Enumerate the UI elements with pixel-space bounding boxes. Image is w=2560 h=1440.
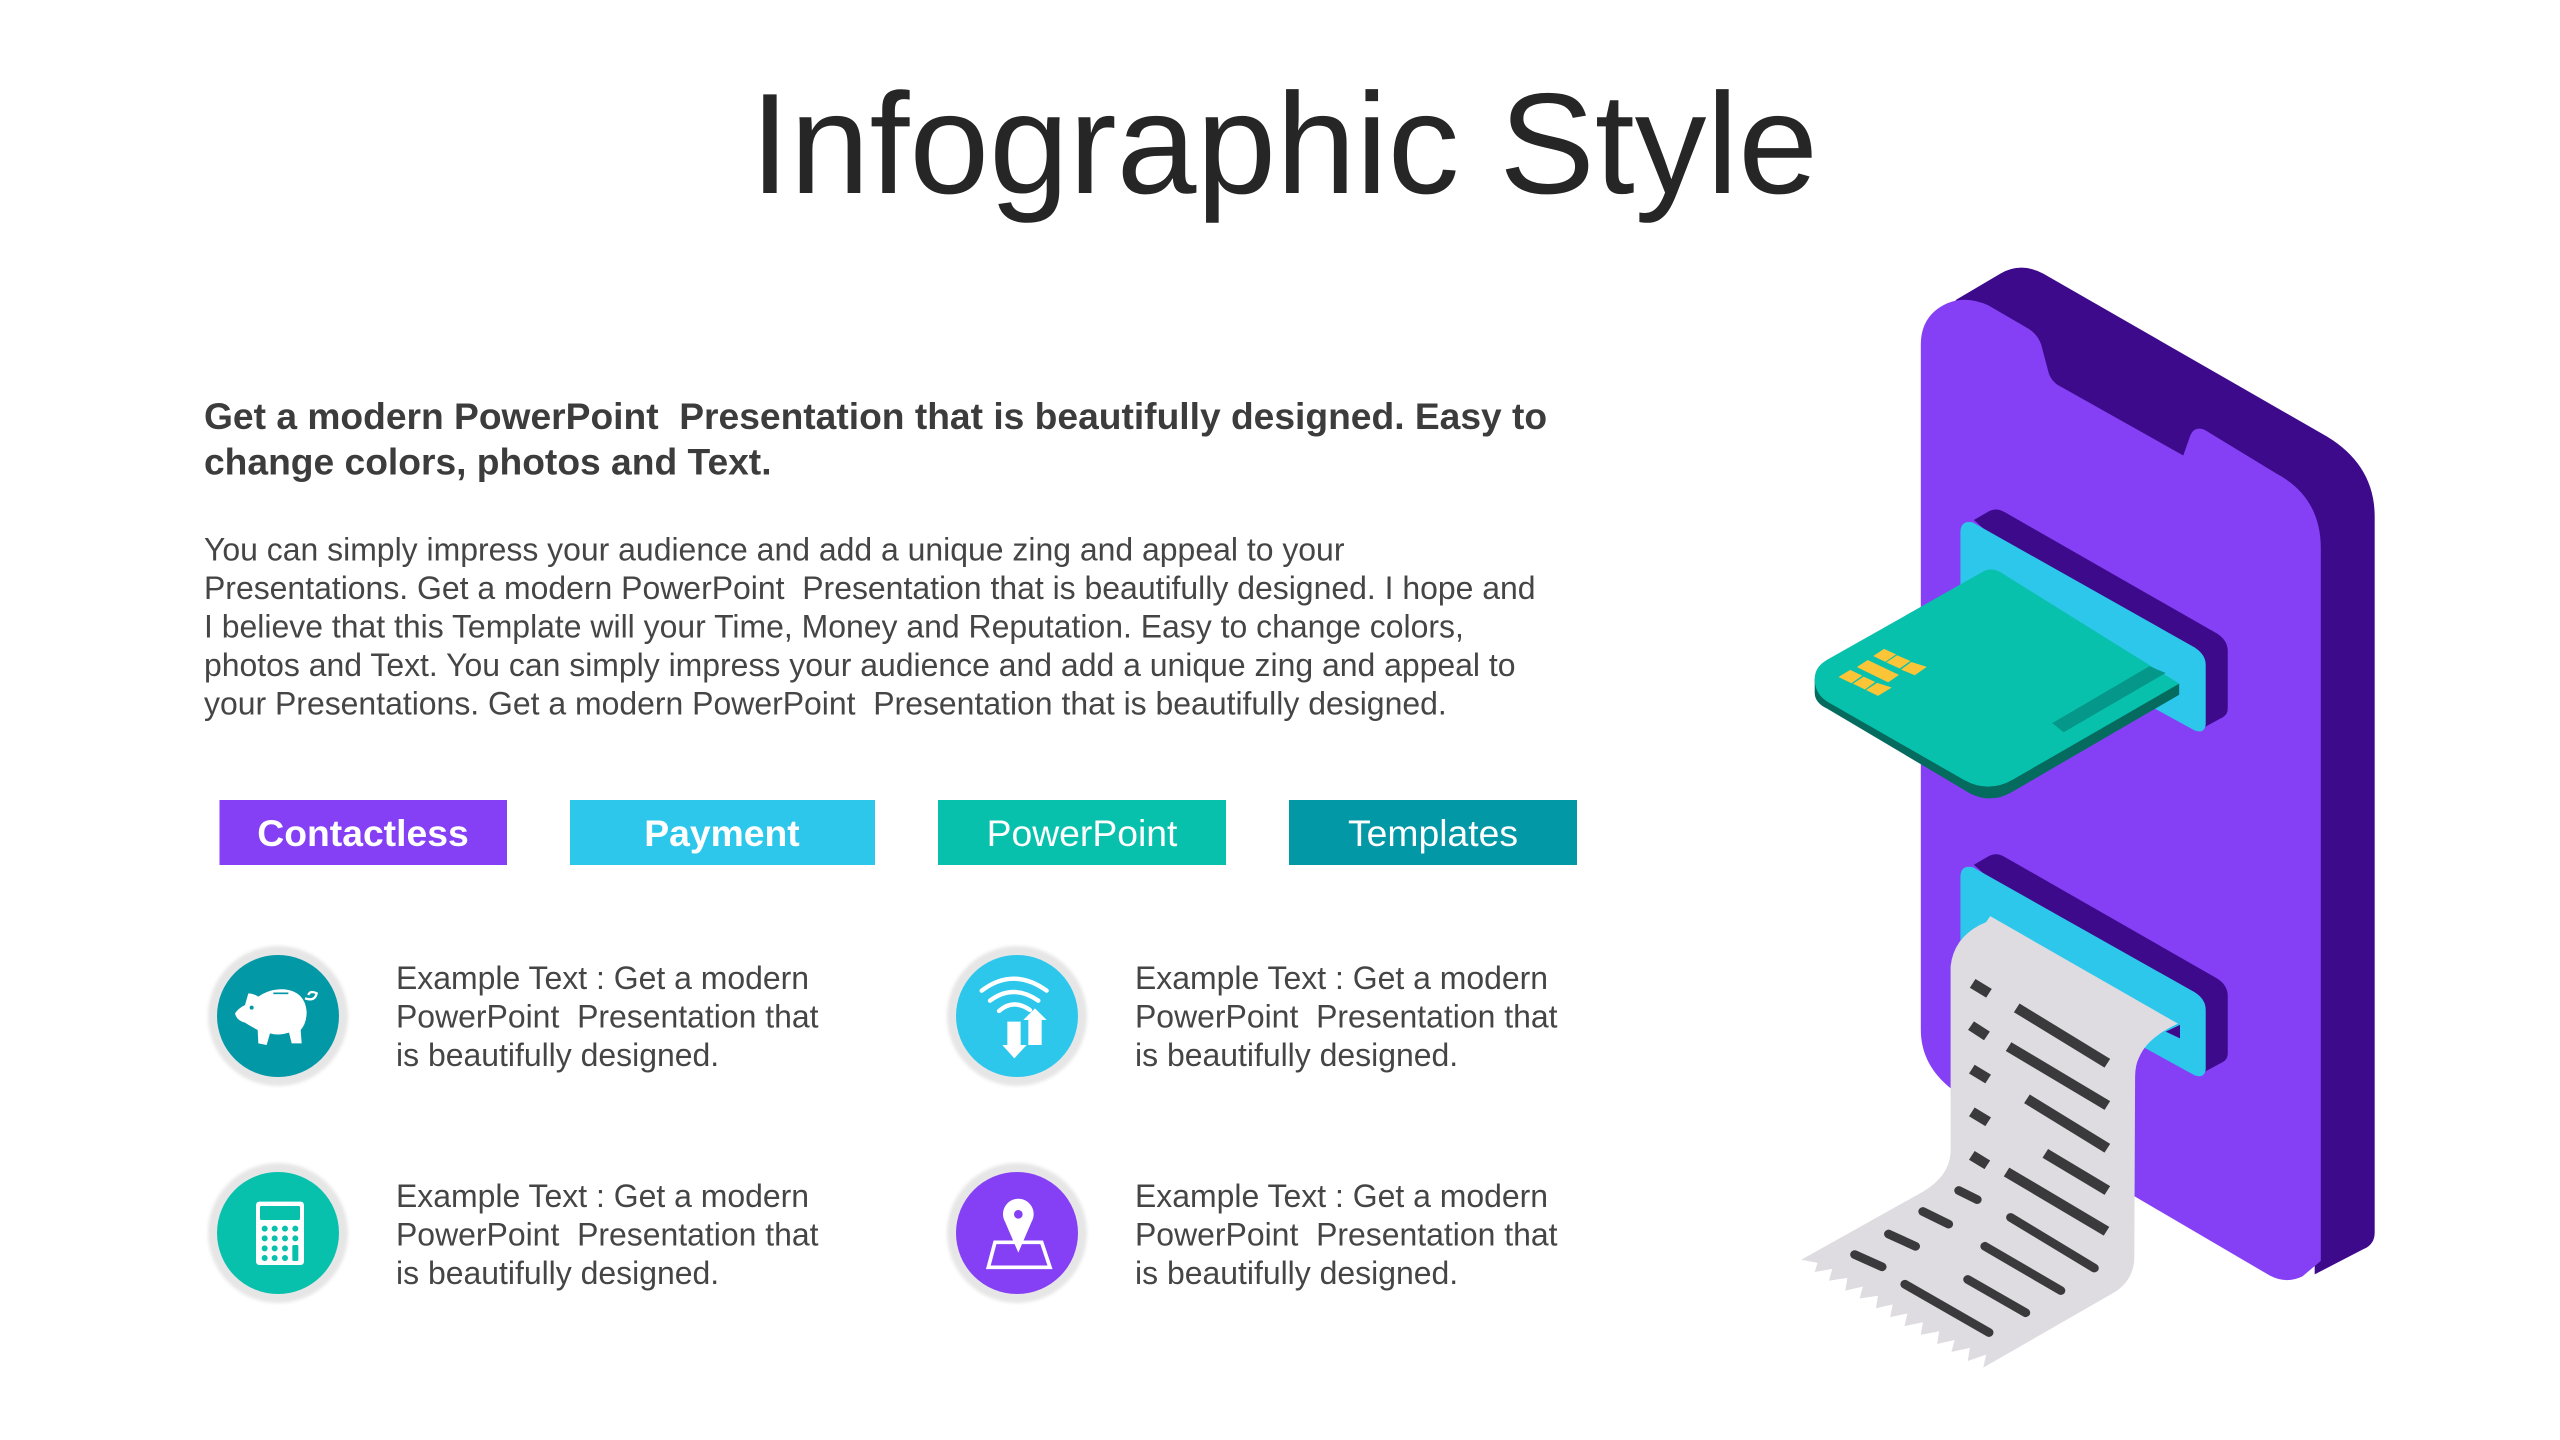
text: map pin item: PowerPoint Presentation that <box>1135 1216 1558 1252</box>
text: calculator item: is beautifully designed. <box>396 1255 719 1291</box>
body paragraph: Presentations. Get a modern PowerPoint Presentation that is beautifully designed. I hope and <box>204 570 1536 606</box>
text: wifi item <box>1135 960 1558 1073</box>
text: calculator item: PowerPoint Presentation that <box>396 1216 819 1252</box>
text: map pin item: is beautifully designed. <box>1135 1255 1458 1291</box>
phone front <box>1921 300 2321 1280</box>
button: Payment: Payment <box>644 812 800 854</box>
body paragraph: I believe that this Template will your Time, Money and Reputation. Easy to change colors, <box>204 608 1464 644</box>
button: PowerPoint: PowerPoint <box>987 812 1178 854</box>
button: Contactless <box>220 800 507 865</box>
body paragraph <box>204 532 1536 722</box>
card stripe <box>2052 666 2166 732</box>
text: wifi item: PowerPoint Presentation that <box>1135 998 1558 1034</box>
button: Templates <box>1289 800 1577 865</box>
button: Contactless: Contactless <box>257 812 469 854</box>
phone side <box>1956 268 2375 1274</box>
illustration: phone with card and receipt <box>1801 268 2375 1368</box>
subheading: change colors, photos and Text. <box>204 440 772 482</box>
top slot <box>1960 509 2228 731</box>
text: wifi item: Example Text : Get a modern <box>1135 960 1548 996</box>
credit card <box>1815 569 2179 798</box>
subheading <box>204 395 1547 482</box>
text: calculator item <box>396 1178 819 1291</box>
icon: piggy bank <box>208 946 348 1086</box>
body paragraph: your Presentations. Get a modern PowerPoint Presentation that is beautifully designed. <box>204 686 1447 722</box>
card chip <box>1839 649 1926 696</box>
text: piggy bank item <box>396 960 819 1073</box>
title: Infographic Style <box>750 64 1818 224</box>
text: map pin item: Example Text : Get a modern <box>1135 1178 1548 1214</box>
button: Payment <box>570 800 875 865</box>
text: piggy bank item: PowerPoint Presentation that <box>396 998 819 1034</box>
body paragraph: You can simply impress your audience and add a unique zing and appeal to your <box>204 532 1345 568</box>
button: PowerPoint <box>938 800 1226 865</box>
subheading: Get a modern PowerPoint Presentation that is beautifully designed. Easy to <box>204 395 1547 437</box>
icon: calculator <box>208 1163 348 1303</box>
text: piggy bank item: is beautifully designed. <box>396 1037 719 1073</box>
bottom slot <box>1960 854 2228 1076</box>
receipt lines <box>1855 983 2107 1332</box>
text: piggy bank item: Example Text : Get a modern <box>396 960 809 996</box>
text: calculator item: Example Text : Get a modern <box>396 1178 809 1214</box>
text: wifi item: is beautifully designed. <box>1135 1037 1458 1073</box>
button: Templates: Templates <box>1348 812 1518 854</box>
text: map pin item <box>1135 1178 1558 1291</box>
receipt <box>1801 916 2180 1368</box>
icon: wifi transfer <box>947 946 1087 1086</box>
icon: map pin <box>947 1163 1087 1303</box>
body paragraph: photos and Text. You can simply impress your audience and add a unique zing and appeal to <box>204 647 1516 683</box>
